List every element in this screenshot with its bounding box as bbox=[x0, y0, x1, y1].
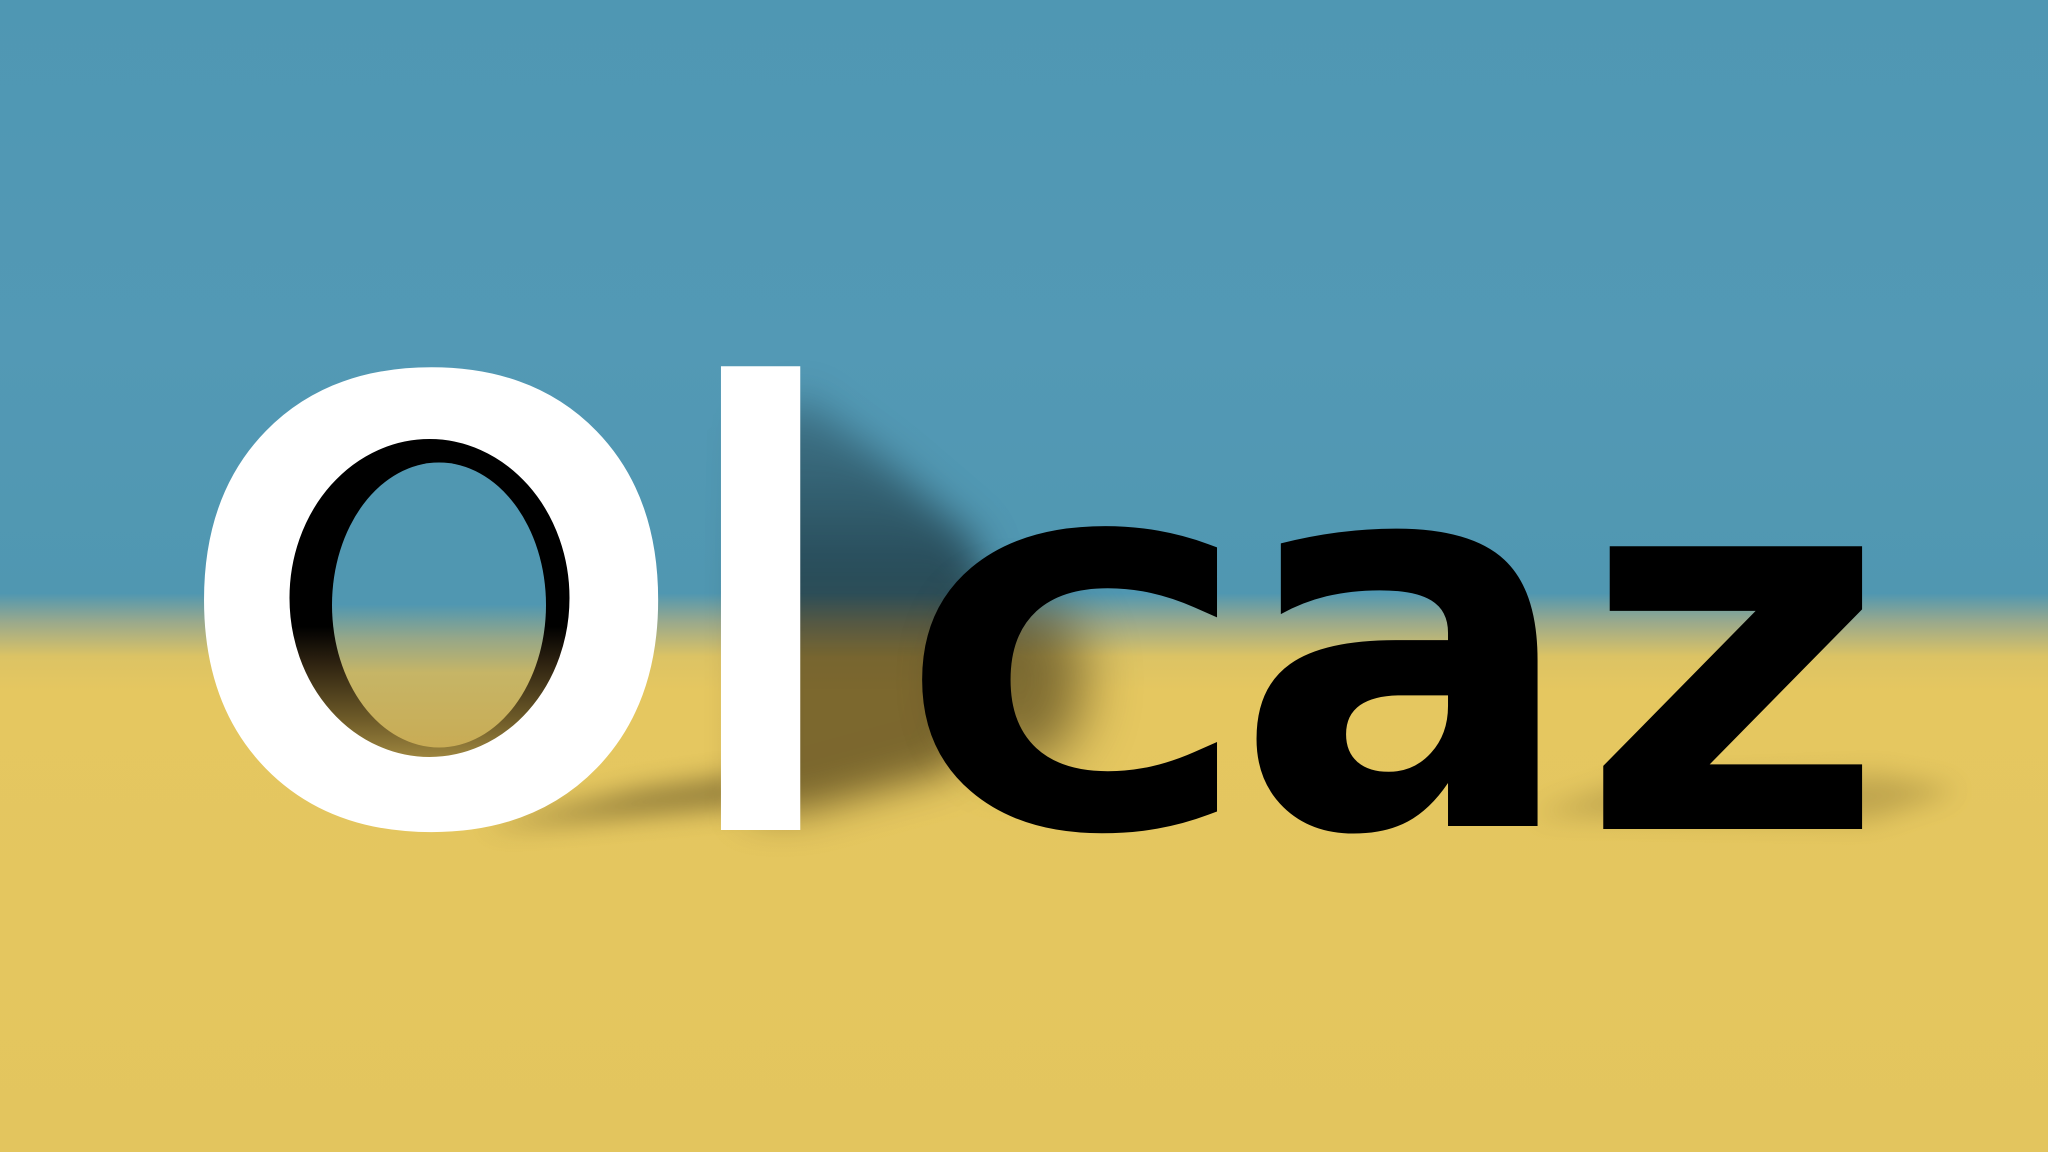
wordmark: Olcaz bbox=[180, 252, 1887, 966]
letter a: a bbox=[1235, 333, 1578, 952]
shadow inside letter c bbox=[955, 595, 1085, 765]
shadow of letters a and z bbox=[1530, 775, 1960, 820]
letter z: z bbox=[1580, 351, 1887, 952]
cast shadows bbox=[480, 395, 1960, 828]
shadow of letter l bbox=[750, 395, 995, 812]
O counter depth: dark inner wall and see-through hole bbox=[278, 427, 582, 769]
letter c: c bbox=[904, 357, 1240, 930]
letter O: O bbox=[180, 270, 682, 952]
shadow of letter O bbox=[480, 775, 740, 828]
letter l: l bbox=[681, 252, 841, 966]
